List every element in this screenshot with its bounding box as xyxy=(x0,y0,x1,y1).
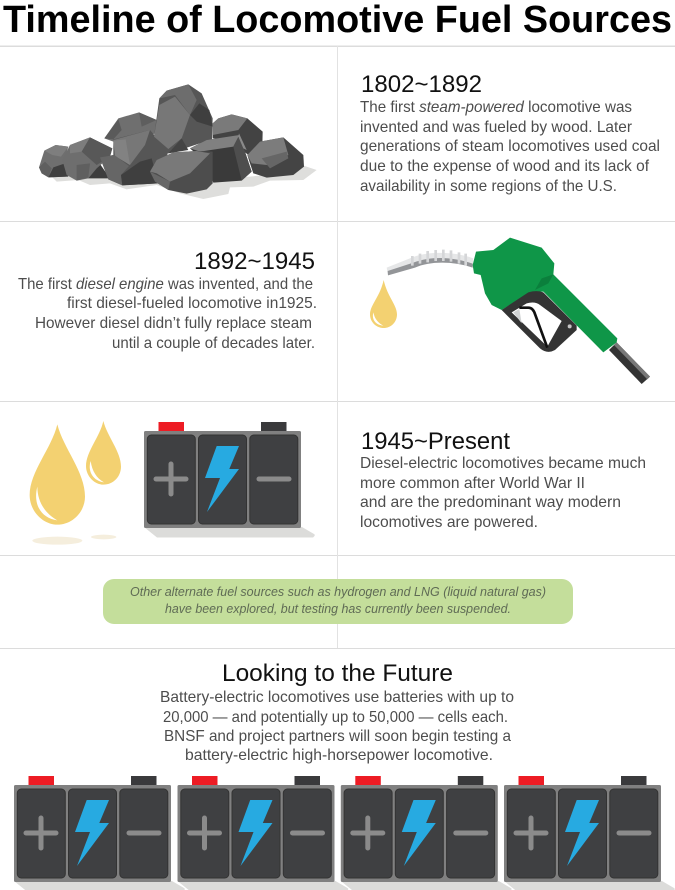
heading: Looking to the Future: Looking to the Future xyxy=(222,660,453,687)
icon: battery xyxy=(144,422,315,538)
text block: 1802~1892: 1802~1892 xyxy=(361,71,482,98)
callout: alternate fuel sources: Other alternate fuel sources such as hydrogen and LNG (liquid natural gas) xyxy=(130,584,546,599)
text block: 1892~1945: first diesel-fueled locomotive in1925. xyxy=(67,295,317,312)
coal left rocks xyxy=(39,112,168,185)
text block: 1945~Present: more common after World War II xyxy=(360,475,585,492)
nozzle spout and drop xyxy=(370,250,473,328)
text block: 1802~1892: generations of steam locomotives used coal xyxy=(360,138,660,155)
text block: 1892~1945: The first diesel engine was invented, and the xyxy=(18,276,313,293)
icon: oil drops xyxy=(30,421,121,545)
icon: fuel nozzle with drop xyxy=(370,238,650,384)
text block: 1892~1945: 1892~1945 xyxy=(194,248,315,275)
callout: alternate fuel sources xyxy=(103,579,573,624)
text block: 1802~1892: due to the expense of wood and its lack of xyxy=(360,158,650,175)
text block: 1892~1945: However diesel didn’t fully replace steam xyxy=(35,315,312,332)
text block: 1802~1892: availability in some regions of the U.S. xyxy=(360,178,617,195)
coal right rocks xyxy=(190,114,304,183)
text block: 1802~1892: The first steam-powered locomotive was xyxy=(360,99,632,116)
icon: coal pile xyxy=(39,84,317,199)
text block: 1945~Present: and are the predominant way modern xyxy=(360,494,621,511)
text block: 1945~Present: Diesel-electric locomotives became much xyxy=(360,455,646,472)
text block: future: battery-electric high-horsepower locomotive. xyxy=(185,747,493,764)
text block: future: 20,000 — and potentially up to 50,000 — cells each. xyxy=(163,709,508,726)
text block: future xyxy=(160,689,514,764)
text block: 1892~1945: until a couple of decades later. xyxy=(112,335,315,352)
coal front rock xyxy=(150,151,213,194)
icon: battery row xyxy=(14,776,675,890)
text block: future: BNSF and project partners will soon begin testing a xyxy=(164,728,511,745)
coal large rock xyxy=(154,84,213,153)
text block: 1802~1892 xyxy=(360,71,660,195)
coal shadow xyxy=(50,165,317,199)
text block: 1802~1892: invented and was fueled by wood. Later xyxy=(360,119,632,136)
text block: 1945~Present xyxy=(360,428,646,531)
text block: 1945~Present: 1945~Present xyxy=(361,428,510,455)
text block: future: Battery-electric locomotives use batteries with up to xyxy=(160,689,514,706)
section dividers xyxy=(0,46,675,649)
text block: 1892~1945 xyxy=(18,248,317,352)
nozzle body xyxy=(473,238,650,384)
title: Timeline of Locomotive Fuel Sources xyxy=(3,0,672,41)
text block: 1945~Present: locomotives are powered. xyxy=(360,514,538,531)
callout: alternate fuel sources: have been explored, but testing has currently been suspended. xyxy=(165,601,511,616)
